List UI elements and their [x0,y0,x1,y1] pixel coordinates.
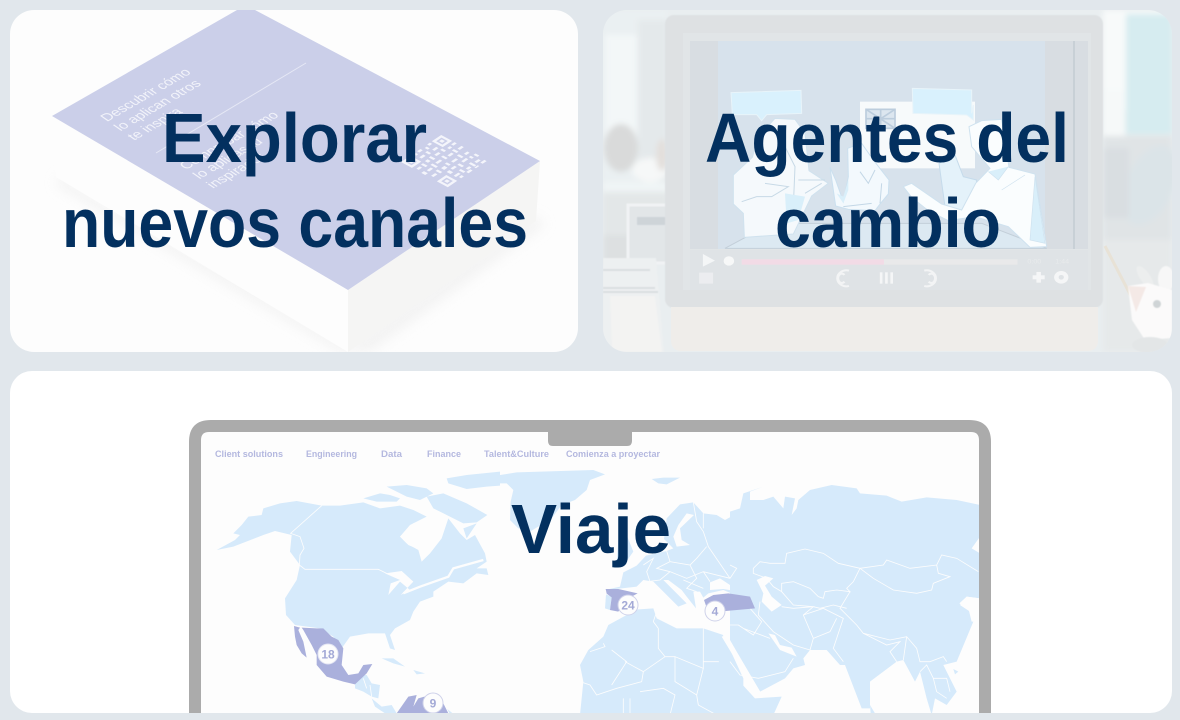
badge 18: 18 [321,648,335,662]
video frame [718,41,1045,249]
QR code [401,135,488,187]
badge 9: 9 [430,696,437,710]
figure centre [830,143,889,211]
portugal [605,594,612,610]
navigation menu: Engineering [306,449,357,460]
cover text: descubrir: te inspira [123,105,186,143]
book left side [52,116,348,352]
whiteboard [860,102,975,168]
navigation menu: Client solutions [215,449,283,460]
cover text: comprobar [180,112,278,188]
navigation menu [215,449,660,460]
navigation menu: Comienza a proyectar [566,449,660,460]
player time: 1:44 [1055,259,1069,265]
world map [217,470,980,715]
cover text: comprobar: inspirador [202,150,269,191]
book cover [52,10,540,290]
laptop frame [189,420,991,713]
figure left [733,118,828,237]
badge 24 [618,595,638,615]
cat figurine [1128,266,1172,339]
iceland and uk [617,478,680,563]
progress bar [742,259,1018,265]
badge 18 [318,644,338,664]
flag [866,109,895,128]
monitor chin [671,307,1098,308]
spain highlighted [606,589,638,612]
player time: 0:00 [1027,259,1042,265]
americas [217,472,500,713]
blurred office background right [1104,10,1172,240]
pencil [1105,246,1131,296]
laptop notch [548,432,632,446]
cover text: descubrir: lo aplican otros [110,77,205,133]
heading: explorar nuevos canales: nuevos canales [62,184,528,262]
figure right large [903,119,1047,247]
panel: viaje [10,371,1172,715]
table [725,223,1047,248]
book shadow [362,252,496,346]
video illustration [725,88,1047,248]
background monitor [626,204,665,258]
asia [704,485,980,715]
video edge line [1074,41,1075,249]
badge 24: 24 [621,598,635,612]
speech bubble left [731,90,802,121]
player play icon [690,250,1088,290]
greenland [490,470,605,532]
panel: explorar nuevos canales [10,10,578,352]
europe and africa [490,470,747,715]
cover text: comprobar: Comprobar cómo [175,108,282,172]
cover text: comprobar: lo aplicas tú [189,135,266,181]
heading: agentes del cambio: Agentes del [705,99,1069,177]
desk chair [603,258,664,352]
heading: viaje: Viaje [511,490,671,568]
speech bubble right [912,88,973,120]
player controls [699,270,1068,286]
navigation menu: Talent&Culture [484,449,549,460]
cover text: descubrir [100,70,200,140]
badge 4 [705,601,725,621]
south america highlighted [397,695,448,713]
laptop screen [201,432,979,713]
badge 4: 4 [712,604,719,618]
turkey highlighted [704,593,755,612]
cover text: descubrir: Descubrir cómo [96,65,195,124]
figure right small [939,155,977,217]
heading: agentes del cambio: cambio [775,184,1001,262]
book right side [348,162,540,332]
player time [1030,259,1068,264]
mexico highlighted [294,626,372,684]
monitor screen [683,33,1091,290]
blurred office background left [604,38,665,258]
europe [605,502,743,608]
navigation menu: Data [381,449,403,460]
navigation menu: Finance [427,449,461,460]
monitor frame [665,15,1103,308]
badge 9 [423,693,443,713]
heading: explorar nuevos canales: Explorar [162,99,427,177]
cover divider line [156,63,306,153]
panel: agentes del cambio [603,10,1180,353]
africa [580,608,743,715]
